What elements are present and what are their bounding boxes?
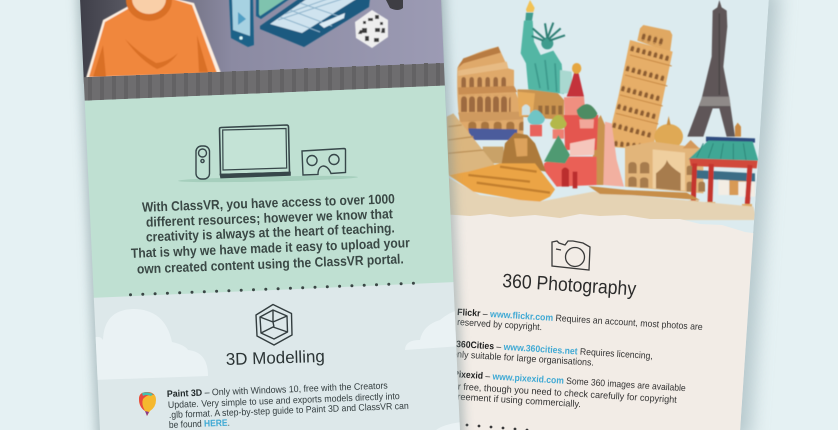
text block: Pixexid xyxy=(457,370,686,409)
Statue of Liberty xyxy=(521,0,573,94)
dotted divider xyxy=(466,424,528,430)
Pagoda xyxy=(688,137,758,205)
text block: intro: creativity is always at the heart of teaching. xyxy=(146,220,395,245)
torn paper edge and cream background xyxy=(440,214,775,430)
Pyramid xyxy=(447,113,497,175)
heading: 3D Modelling: 3D Modelling xyxy=(226,347,325,369)
icon: camera xyxy=(552,241,590,270)
Eiffel Tower xyxy=(687,0,741,137)
icon: QR cube xyxy=(355,10,388,48)
icon: cloud left xyxy=(93,309,208,380)
Taj Mahal xyxy=(625,116,755,197)
text block: Flickr: reserved by copyright. xyxy=(457,316,542,332)
text block: Paint 3D: .glb format. A step-by-step guide to Paint 3D and ClassVR can xyxy=(169,400,409,420)
text block: intro xyxy=(131,191,411,277)
text block: Pixexid: for free, though you need to check carefully for copyright xyxy=(450,380,677,405)
St Basil's Cathedral xyxy=(527,63,624,188)
header illustration background xyxy=(78,0,445,85)
text block: 360Cities: only suitable for large organisations. xyxy=(452,348,594,368)
icon: controller xyxy=(196,146,210,179)
Sphinx xyxy=(448,133,555,202)
dotted divider xyxy=(129,282,415,296)
text block: intro: With ClassVR, you have access to over 1000 xyxy=(142,191,395,215)
icon group: controller, tablet and VR viewer xyxy=(178,125,358,183)
icon: tablet xyxy=(220,125,290,178)
illustration: person in orange shirt xyxy=(86,0,221,78)
illustration: world landmarks xyxy=(447,0,758,220)
icon: 3D cube xyxy=(256,304,292,345)
text block: 360Cities: 360Cities – www.360cities.net Requires licencing, xyxy=(456,338,653,361)
icon: Paint 3D logo xyxy=(139,392,156,416)
right sheet shadow xyxy=(442,0,780,430)
text block: intro: different resources; however we know that xyxy=(146,206,393,230)
mint section xyxy=(78,86,456,300)
heading: 360 Photography: 360 Photography xyxy=(502,270,637,300)
text block: Pixexid: agreement if using commercially. xyxy=(447,390,581,409)
sand ground xyxy=(447,177,757,220)
icon: dark device at top xyxy=(385,0,403,10)
light blue section xyxy=(90,282,470,430)
text block: Flickr: Flickr – www.flickr.com Requires an account, most photos are xyxy=(457,306,703,332)
illustration: laptop xyxy=(256,0,370,47)
left sheet shadow xyxy=(76,0,465,430)
text block: Pixexid: Pixexid – www.pixexid.com Some 360 images are available xyxy=(453,368,686,393)
Pisa tower xyxy=(607,25,673,150)
text block: Paint 3D xyxy=(167,380,409,430)
panel: left sheet, ClassVR and 3D modelling xyxy=(78,0,470,430)
Colosseum xyxy=(457,47,564,163)
illustration: phone xyxy=(229,0,254,47)
text block: Paint 3D: Paint 3D – Only with Windows 10, free with the Creators xyxy=(167,380,388,399)
grey band xyxy=(78,63,446,101)
text block: Paint 3D: be found HERE. xyxy=(169,417,230,430)
panel: right sheet, landmarks and 360 photography xyxy=(440,0,775,430)
text block: intro: own created content using the ClassVR portal. xyxy=(137,251,404,277)
icon: cloud right xyxy=(405,310,462,430)
text block: Paint 3D: Update. Very simple to use and exports models directly into xyxy=(168,390,400,410)
icon: VR viewer xyxy=(302,148,346,175)
text block: intro: That is why we have made it easy to upload your xyxy=(131,235,411,261)
